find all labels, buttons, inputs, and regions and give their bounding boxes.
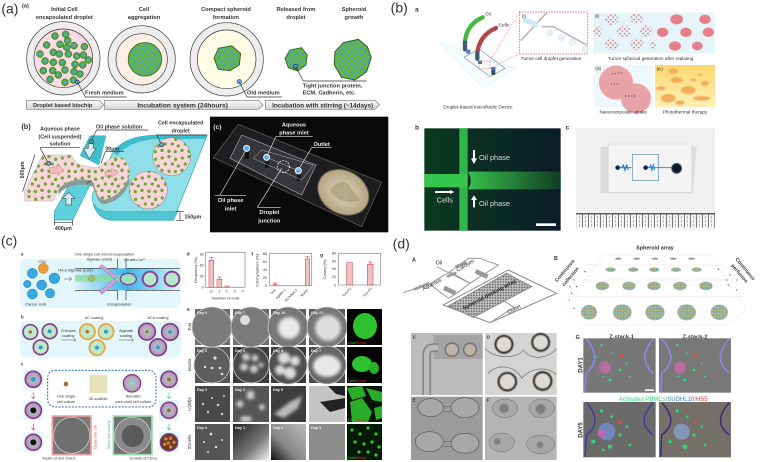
photo labels: Droplet [259, 210, 279, 216]
subpanel c: selection of CSCs: One single [57, 395, 75, 399]
flow arrows [49, 143, 119, 205]
panel title (a): (a) [1, 0, 18, 16]
subpanel a: encapsulation: Cancer cells [25, 302, 46, 306]
chart f: colony formation: 60 [263, 260, 267, 264]
sublabel A: A [412, 258, 416, 264]
subpanel b: coating [20, 314, 181, 358]
chip labels [421, 258, 523, 316]
side labels: collection [561, 266, 581, 288]
labels and leaders: Cell encapsulated [158, 120, 203, 126]
photo background [210, 117, 388, 232]
labels and leaders: 500μm [20, 161, 26, 178]
day labels: Day 5 [273, 388, 283, 392]
arrow: droplet based biochip [27, 100, 104, 109]
image E: E [413, 398, 416, 403]
row 4 images: Live/Dead [348, 455, 366, 460]
released spheroid [285, 48, 307, 71]
chart d: number of cells [187, 252, 245, 300]
oil tube [465, 17, 483, 49]
aqueous stream shadow [58, 178, 130, 204]
day labels: Day 14 [273, 311, 286, 315]
chip labels: Oil [436, 260, 442, 266]
chip on ruler photo [576, 128, 715, 231]
callout: fresh medium [77, 82, 127, 97]
subpanel b: coating: AC coating [85, 316, 103, 320]
chart d: number of cells: 0 [210, 288, 213, 293]
photo labels: inlet [225, 206, 237, 212]
chart g: colony: 80 [332, 251, 336, 255]
glass slide [213, 124, 382, 227]
stage headings: Initial Cell [51, 7, 78, 13]
panel: (c) nanocapsule encapsulation [1, 232, 181, 461]
day labels: Day 4 [235, 349, 246, 353]
sublabel B: B [554, 256, 558, 262]
channels and ports [244, 145, 313, 181]
arrow: incubation system: Incubation system (24hours) [137, 102, 228, 109]
side labels: Continuous [554, 258, 577, 284]
fluorescence micrograph [424, 128, 561, 231]
chart d: number of cells: 3 [234, 288, 237, 293]
image D [485, 333, 557, 395]
droplet lower [129, 171, 167, 209]
callout: tight junction: Tight junction protein, [303, 83, 363, 89]
oil channel top [80, 136, 106, 165]
cell beads in stream [24, 155, 130, 201]
day labels: Day 5 [273, 349, 283, 353]
inset (iv): photothermal therapy [655, 65, 715, 107]
subpanel c: selection of CSCs: c [21, 362, 24, 367]
chip labels: Calcium [456, 258, 476, 273]
row 3 images: Live/Dead [348, 417, 366, 422]
stage headings: Released from [276, 7, 315, 13]
subpanel a: encapsulation: Oil with Ca²⁺ [124, 257, 146, 262]
side labels: perfusion [729, 263, 749, 284]
image G: day 5 stack 1 [583, 402, 656, 457]
chip outline [464, 49, 505, 77]
droplet 2: cell aggregate [108, 26, 175, 93]
row labels: DAY1 [578, 357, 584, 373]
chart g: colony: 20 [332, 275, 336, 279]
row labels: 2Dcells [187, 434, 192, 449]
coin relief [330, 182, 360, 202]
heading: spheroid array: Spheroid array [636, 246, 674, 252]
spheroids row 3 [596, 282, 713, 290]
stage headings: growth [345, 15, 364, 21]
image G: day 5 stack 2 [659, 402, 731, 457]
chamber top wall [113, 135, 207, 156]
image G: day 1 stack 1 [583, 338, 656, 393]
stage headings: Compact spheroid [201, 7, 251, 13]
subpanel a: encapsulation: a [21, 252, 24, 257]
row 1 images: Live/Dead [348, 340, 366, 345]
cells tube [477, 28, 496, 59]
subpanel c: selection of CSCs: core-shell cell culture [115, 400, 151, 404]
labels and leaders: 30μm [105, 146, 120, 152]
row labels [578, 357, 584, 438]
photo labels: Oil phase [218, 198, 243, 204]
droplet 1: dispersed cells [27, 22, 100, 95]
side labels: Continuous [734, 257, 756, 282]
inset (iv): photothermal therapy: (iv) [657, 67, 663, 72]
row 3 images [195, 386, 382, 422]
fluorescence micrograph: Oil phase [479, 153, 510, 162]
chart d: number of cells: 1 [218, 288, 221, 293]
stage headings: Spheroid [342, 7, 367, 13]
chart f: colony formation: 0 [265, 284, 267, 288]
subpanel b: coating: b [21, 314, 24, 319]
chart d: number of cells: d [187, 252, 190, 258]
droplet upper [153, 138, 191, 176]
row labels [187, 323, 192, 449]
chip labels: Outlet [507, 304, 523, 316]
device labels: Oil [485, 12, 491, 17]
subpanel c: selection of CSCs: cell culture [57, 400, 75, 404]
fluorescence micrograph: Oil phase [479, 199, 510, 208]
chart d: number of cells: Number of cells [212, 295, 240, 300]
label: nanocomposite uptake: Nanocomposite uptake [599, 110, 648, 115]
ports [466, 50, 495, 75]
labels and leaders: 150μm [184, 215, 201, 221]
chart d: number of cells: 90 [200, 252, 204, 256]
row labels: Tosi [187, 323, 192, 331]
chart g: colony: 0 [334, 283, 336, 287]
stage headings: aggregation [128, 15, 161, 21]
subpanel c: selection of CSCs: Death of non-CSCs [42, 457, 76, 461]
panel e: micrograph grid [187, 307, 382, 460]
inset (i): droplet generation [519, 12, 588, 54]
coin [310, 161, 377, 224]
row 2 images: Live/Dead [348, 378, 366, 383]
subpanel a: encapsulation [20, 252, 181, 308]
photo labels: Outlet [313, 142, 330, 148]
subpanel a: encapsulation: Encapsulation [107, 302, 131, 306]
chart d: number of cells: 2 [226, 288, 229, 293]
chart f: colony formation: f [251, 252, 253, 258]
inset (iii): nanocomposite uptake: (iii) [595, 66, 602, 71]
callout: fresh medium: Fresh medium [85, 91, 124, 97]
chip inlet blocks [413, 261, 489, 295]
panel: (b) right tumor spheroid schematic [391, 0, 715, 115]
stage headings [36, 7, 367, 21]
stage headings: formation [213, 15, 240, 21]
subpanel c: selection of CSCs: Dead one cell [93, 425, 98, 449]
sublabel b: b [415, 125, 419, 132]
chart f: colony formation: ACA/MA-1 [284, 288, 298, 303]
inset (i): droplet generation: (i) [522, 13, 526, 18]
stage headings: encapsulated droplet [36, 15, 93, 21]
callout: tight junction: ECM, Cadherin, etc. [303, 90, 356, 96]
day labels: Day 2 [273, 426, 283, 430]
chart f: colony formation: AgMA-1 [275, 288, 287, 300]
image C: C [413, 334, 417, 339]
subpanel a: encapsulation: One single cell microencapsulation [75, 252, 134, 256]
row labels: DAY5 [578, 422, 584, 438]
panel title (d): (d) [393, 235, 410, 251]
label: spheroid generation: Tumor spheroid generation after replating [608, 56, 694, 61]
photo labels: Aqueous [282, 123, 306, 129]
subpanel c: selection of CSCs: Growth of CSCs [129, 457, 157, 461]
chart f: colony formation: 80 [263, 252, 267, 256]
chart f: colony formation: 40 [263, 268, 267, 272]
chart f: colony formation: Colony/sphere (%) [255, 253, 260, 287]
panel: (b) right fluorescence image and chip photo [415, 125, 715, 231]
chart f: colony formation [251, 252, 312, 303]
chart g: colony: Tosi-P3 [362, 287, 373, 298]
inset (iii): nanocomposite uptake [594, 65, 653, 113]
array outline [563, 255, 747, 325]
oil channel bottom [54, 182, 92, 220]
image F: F [487, 398, 490, 403]
chart g: colony: 40 [332, 267, 336, 271]
chart d: number of cells: 0 [202, 286, 204, 290]
device labels: Droplet-based microfluidic Device [443, 104, 513, 109]
image G: day 1 stack 2 [659, 338, 731, 393]
day labels: Day 3 [235, 388, 245, 392]
chip chamber [92, 135, 207, 212]
labels and leaders: solution [50, 142, 70, 148]
subpanel c: selection of CSCs: 3D scaffold [88, 397, 108, 401]
labels and leaders: Aqueous phase [40, 127, 80, 133]
day labels: Day 3 [311, 426, 321, 430]
inset (ii): spheroids after replating [593, 13, 715, 53]
stack headings [609, 334, 707, 340]
row 2 images [194, 346, 382, 384]
stage headings: Cell [139, 7, 150, 13]
label: droplet generation: Tumor cell droplet generation [521, 56, 582, 61]
chamber side wall [93, 197, 178, 220]
stack headings: Z-stack-2 [683, 334, 707, 340]
spheroids row 1 [615, 258, 695, 260]
row 4 images [195, 424, 382, 460]
sublabel G: G [576, 335, 580, 341]
panel: (b) droplet generation schematic [20, 120, 207, 232]
chart f: colony formation: Mustn [299, 288, 309, 298]
day labels: Day 0 [197, 311, 207, 315]
subpanel a: encapsulation: HA & Alginate (core) [58, 268, 94, 272]
legend: cell populations: Activated PBMCs/SUDHL10/HS5 [619, 397, 708, 403]
day labels: Day 7 [235, 311, 245, 315]
chip layout [403, 258, 557, 323]
device labels: Cells [499, 22, 510, 27]
label: photothermal therapy: Photothermal therapy [663, 110, 708, 115]
arrow: incubation with stirring: Incubation with stirring (~14days) [272, 102, 373, 109]
subpanel c: selection of CSCs: Nanoliter [126, 395, 142, 399]
arrow: incubation system [105, 100, 263, 109]
labels and leaders: 400μm [55, 226, 72, 232]
subpanel b: coating: ACA coating [147, 316, 169, 320]
arrow: droplet based biochip: Droplet based biochip [33, 103, 93, 109]
chart g: colony: 60 [332, 259, 336, 263]
chart d: number of cells: 30 [200, 275, 204, 279]
chart g: colony: Tosi-P2 [341, 287, 352, 298]
subpanel c: selection of CSCs [21, 362, 179, 461]
image D: D [487, 334, 491, 339]
photo labels: phase inlet [279, 131, 309, 137]
day labels: Day 0 [197, 349, 207, 353]
fluorescence micrograph: Cells [437, 195, 453, 204]
panel: (a) spheroid formation stages [1, 0, 380, 109]
day labels [197, 311, 323, 430]
stack headings: Z-stack-1 [609, 334, 634, 340]
photo labels: (c) [213, 124, 221, 131]
chart f: colony formation: 20 [263, 276, 267, 280]
spheroids row 2 [606, 267, 702, 272]
panel: (d) spheroid docking chip [393, 235, 756, 341]
side labels [554, 257, 756, 288]
panel: (d) micrographs [411, 333, 731, 460]
panel title (c): (c) [1, 232, 17, 248]
grown spheroid [334, 39, 371, 80]
image F [485, 397, 557, 460]
spheroids row 4 [581, 304, 728, 320]
subpanel a: encapsulation: Alginate (shell) [87, 258, 113, 262]
sublabel a: a [415, 7, 419, 14]
subpanel a: encapsulation: CSC [38, 260, 47, 264]
subpanel c: selection of CSCs: Stem cell colony [106, 420, 111, 449]
sublabel a: (a) [22, 3, 29, 9]
labels and leaders: Oil phase solution [96, 124, 142, 130]
chart g: colony: g [320, 253, 323, 259]
day labels: Day 7 [311, 349, 321, 353]
stage headings: droplet [286, 15, 306, 21]
callout: tight junction [296, 67, 367, 96]
aqueous stream [24, 155, 130, 201]
row labels: Mustn [187, 358, 192, 371]
chip labels: Aqueous [421, 277, 443, 292]
day labels: Day 1 [235, 426, 245, 430]
labels and leaders: (Cell suspended) [39, 135, 82, 141]
image C [411, 333, 483, 395]
callout: old medium [239, 82, 282, 97]
PDMS block [230, 135, 316, 195]
flow particles [569, 269, 737, 309]
sublabel c: c [566, 125, 570, 132]
chart f: colony formation: Tosi [269, 288, 277, 295]
labels and leaders: droplet [172, 128, 190, 134]
chart d: number of cells: Frequency (%) [193, 257, 198, 283]
row 1 images [192, 307, 382, 347]
arrow: incubation with stirring [265, 100, 380, 109]
subpanel b: coating: Chitosan [61, 329, 76, 333]
labels and leaders [20, 120, 207, 232]
droplet 3: compact spheroid [190, 23, 263, 96]
chip labels: Spheroid docking array [462, 279, 518, 312]
inset zoom leaders [479, 12, 519, 68]
chart d: number of cells: 4 [242, 288, 245, 293]
device labels [443, 12, 513, 109]
chart d: number of cells: 60 [200, 264, 204, 268]
photo labels [213, 123, 332, 224]
row labels: U(dd)s [187, 397, 192, 411]
subpanel b: coating: Alginate [119, 329, 133, 333]
chart g: colony [320, 251, 381, 298]
device base [438, 42, 515, 87]
subpanel b: coating: coating [62, 334, 75, 338]
day labels: Day 2 [197, 388, 207, 392]
chart g: colony: Colony (%) [322, 259, 327, 279]
day labels: Day 21 [311, 311, 323, 315]
panel e: micrograph grid: e [187, 307, 190, 313]
image E [411, 397, 483, 460]
inset (ii): spheroids after replating: (ii) [595, 13, 600, 18]
subpanel b: coating: coating [120, 334, 132, 338]
day labels: Day 0 [197, 426, 207, 430]
panel: (c) chip photograph [210, 117, 388, 232]
sublabel b: (b) [21, 122, 31, 131]
photo labels: junction [257, 218, 281, 224]
callout: old medium: Old medium [247, 91, 280, 97]
